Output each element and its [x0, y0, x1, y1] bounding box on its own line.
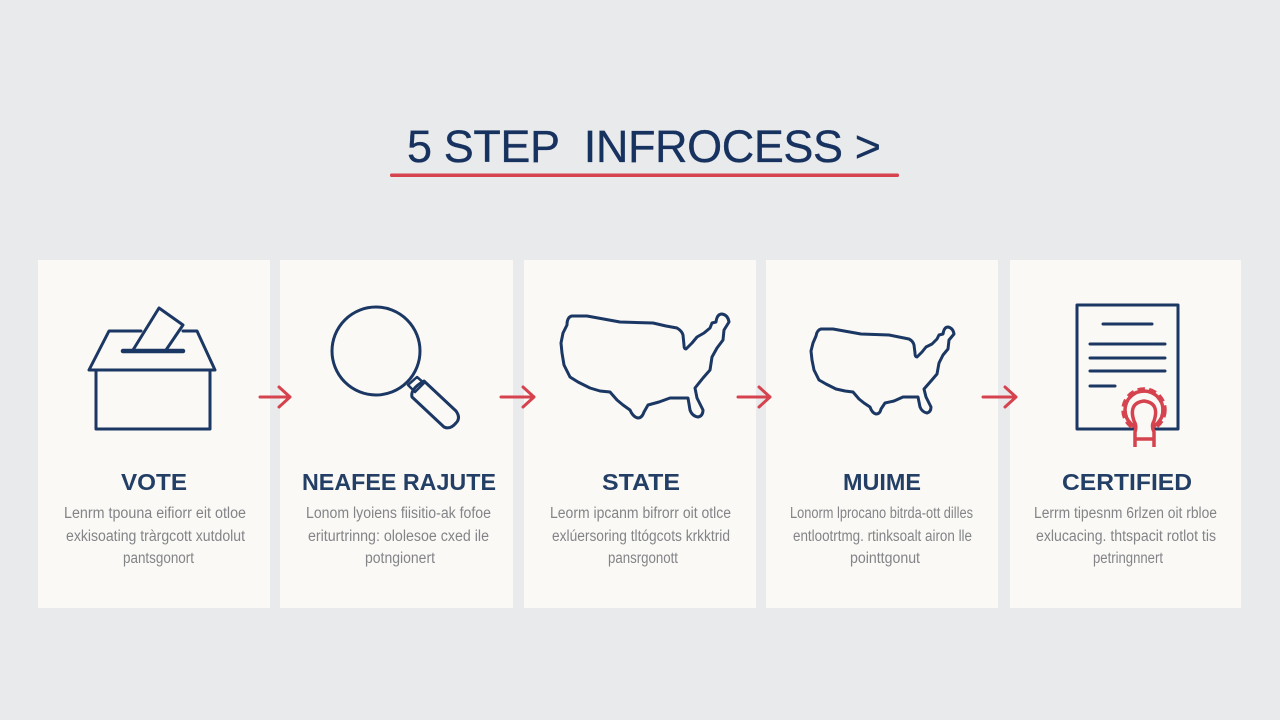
arrow 3 [738, 387, 770, 407]
text block: certified: petringnnert [1093, 550, 1164, 567]
arrow 1 [260, 387, 290, 407]
text block: certified: exlucacing. thtspacit rotlot tis [1036, 528, 1216, 545]
icon: us map large [561, 314, 729, 418]
text block: certified: Lerrm tipesnm 6rlzen oit rbloe [1034, 505, 1217, 522]
heading: neafee rajute: NEAFEE RAJUTE [302, 469, 496, 495]
text block: certified [1034, 505, 1217, 567]
panel: state [524, 260, 756, 608]
text block: state: exlúersoring tltógcots krkktrid [552, 528, 730, 545]
panel: certified [1010, 260, 1241, 608]
text block: mume [790, 505, 973, 567]
text block: neafee rajute: Lonom lyoiens fiisitio-ak fofoe [306, 505, 491, 522]
heading: certified: CERTIFIED [1062, 469, 1192, 495]
heading: mume: MUIME [843, 469, 921, 495]
text block: vote: pantsgonort [123, 550, 195, 567]
text block: vote [64, 505, 246, 567]
text block: mume: entlootrtmg. rtinksoalt airon lle [793, 528, 972, 545]
panel: mume [766, 260, 998, 608]
title: 5 STEP INFROCESS > [407, 121, 881, 172]
text block: state [550, 505, 731, 567]
text block: state: Leorm ipcanm bifrorr oit otlce [550, 505, 731, 522]
text block: neafee rajute: eriturtrinng: ololesoe cxed ile [308, 528, 489, 545]
text block: mume: Lonorm lprocano bitrda-ott dilles [790, 505, 973, 522]
icon: certificate [1077, 305, 1178, 447]
text block: mume: pointtgonut [850, 550, 921, 567]
text block: neafee rajute [306, 505, 491, 567]
icon: us map small [811, 327, 954, 414]
arrow 2 [501, 387, 534, 407]
text block: neafee rajute: potngionert [365, 550, 436, 567]
icon: magnifying glass [332, 307, 458, 428]
icon: red seal [1124, 390, 1164, 447]
title underline [390, 174, 899, 177]
arrow 4 [983, 387, 1016, 407]
panel: neafee rajute [280, 260, 513, 608]
panel: vote [38, 260, 270, 608]
heading: state: STATE [602, 469, 680, 495]
text block: state: pansrgonott [608, 550, 679, 567]
heading: vote: VOTE [121, 469, 187, 495]
icon: ballot box [89, 308, 215, 429]
text block: vote: exkisoating tràrgcott xutdolut [66, 528, 246, 545]
text block: vote: Lenrm tpouna eifiorr eit otloe [64, 505, 246, 522]
